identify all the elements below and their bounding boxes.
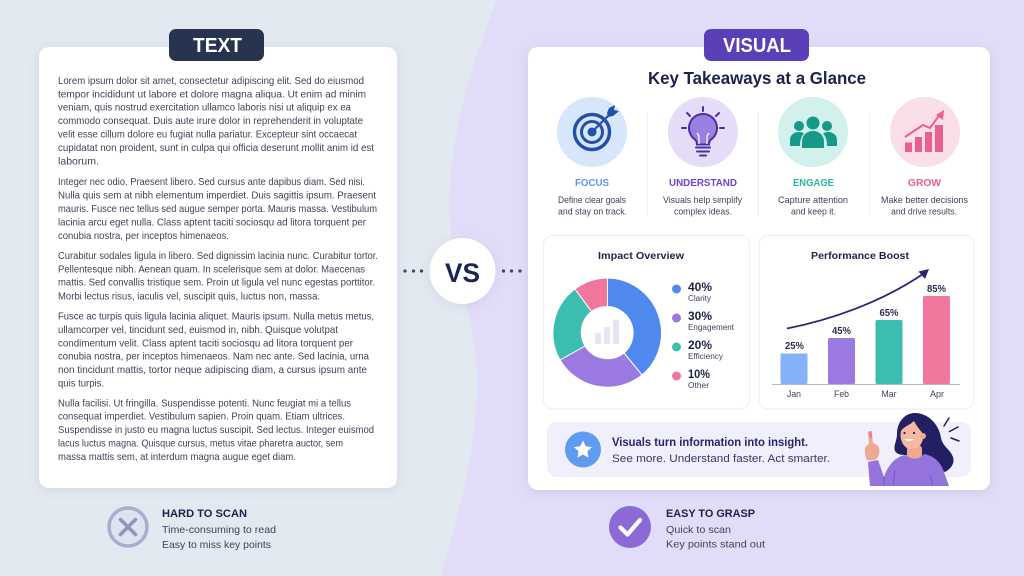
text block: lorem paragraphs: tempor incididunt ut labore et dolore magna aliqua. Ut enim ad minim [58,88,366,100]
text block: lorem paragraphs: cupidatat non proident, sunt in culpa qui officia deserunt mollit anim id est [58,142,374,154]
takeaway: focus [557,97,627,218]
icon: people [778,97,848,167]
legend: Efficiency [688,351,724,361]
takeaway: understand: Visuals help simplify [663,195,742,206]
text block: lorem paragraphs: commodo consequat. Duis aute irure dolor in reprehenderit in voluptate [58,115,363,127]
background: right lavender wave [441,0,1024,576]
bar chart [772,283,960,399]
heading: performance boost: Performance Boost [811,250,910,262]
takeaway: understand: complex ideas. [674,206,732,218]
panel: visual card [528,47,990,490]
legend [672,282,735,390]
text block: lorem paragraphs: mattis. Sed convallis tristique sem. Proin ut ligula vel nunc egestas porttitor. [58,277,375,289]
icon: check circle [609,506,651,548]
legend: Other [688,380,709,390]
verdict: easy to grasp: EASY TO GRASP [666,508,755,520]
text block: lorem paragraphs: quis turpis. [58,378,104,390]
text block: lorem paragraphs: lacus luctus magna. Quisque cursus, metus vitae pharetra auctor, sem [58,437,343,449]
bar chart: 85% [927,283,947,295]
callout: insight banner: Visuals turn information into insight. [612,437,808,449]
text block: lorem paragraphs: Morbi lectus risus, iaculis vel, suscipit quis, luctus non, massa. [58,290,320,302]
heading: TEXT pill: TEXT [193,35,242,57]
icon: lightbulb [668,97,738,167]
title: key takeaways: Key Takeaways at a Glance [648,68,866,88]
connector: left dots [403,269,423,273]
verdict: hard to scan: Time-consuming to read [162,524,276,536]
takeaway: engage: and keep it. [791,206,836,218]
text block: lorem paragraphs: Nulla quis sem at nibh elementum imperdiet. Duis sagittis ipsum. Praesent [58,189,376,201]
heading: VISUAL pill: VISUAL [723,35,791,57]
text block: lorem paragraphs: conubia nostra, per inceptos himenaeos. [58,230,229,242]
takeaway: engage: ENGAGE [793,177,834,189]
illustration: pointing woman [865,413,959,486]
verdict: hard to scan: HARD TO SCAN [162,508,247,520]
connector: right dots [502,269,522,273]
takeaway: engage: Capture attention [778,195,848,206]
legend: 30% [688,311,712,323]
verdict: easy to grasp: Key points stand out [666,538,765,550]
takeaway: focus: Define clear goals [558,195,626,206]
takeaway: grow: GROW [908,177,941,189]
bar chart: 25% [785,340,805,352]
verdict: hard to scan: Easy to miss key points [162,539,271,551]
verdict: easy to grasp: Quick to scan [666,524,731,536]
callout: insight banner: See more. Understand faster. Act smarter. [612,453,830,465]
heading: impact overview: Impact Overview [598,250,685,262]
icon: cross circle [109,508,147,546]
text block: lorem paragraphs: lacinia arcu eget nulla. Class aptent taciti sociosqu ad litora torquent per [58,217,366,229]
takeaway: focus: FOCUS [575,177,609,189]
heading: TEXT pill [169,29,264,61]
panel: impact overview [544,236,750,409]
legend: Clarity [688,293,712,303]
text block: lorem paragraphs: conubia nostra, per inceptos himenaeos. Nam nec ante. Sed lacinia, urna [58,351,369,363]
donut chart [553,278,662,387]
text block: lorem paragraphs: Lorem ipsum dolor sit amet, consectetur adipiscing elit. Sed do eiusmod [58,75,364,87]
icon: rising chart [890,97,960,167]
badge: VS [430,238,496,304]
takeaway: focus: and stay on track. [558,206,627,218]
text block: lorem paragraphs: laborum. [58,156,99,168]
bar chart: Jan [787,389,801,399]
text block: lorem paragraphs: non tincidunt mattis, tortor neque adipiscing diam, a cursus ipsum ante [58,364,367,376]
callout: insight banner [547,422,971,477]
text block: lorem paragraphs: Nulla facilisi. Ut fringilla. Suspendisse potenti. Nunc feugiat mi a tellus [58,397,351,409]
text block: lorem paragraphs: Integer nec odio. Praesent libero. Sed cursus ante dapibus diam. Sed nisi. [58,176,365,188]
text block: lorem paragraphs: Pellentesque nibh. Aenean quam. In scelerisque sem at dolor. Maecenas [58,263,365,275]
bar chart: 65% [880,307,899,319]
text block: lorem paragraphs: ullamcorper vel, tincidunt sed, euismod in, nibh. Quisque volutpat [58,324,338,336]
bar chart: Feb [834,389,849,399]
text block: lorem paragraphs: mauris. Fusce nec tellus sed augue semper porta. Mauris massa. Vestibulum [58,203,377,215]
legend: 10% [688,369,710,381]
legend: Engagement [688,322,735,332]
takeaway: understand [663,97,742,218]
takeaway: engage [778,97,848,218]
verdict: easy to grasp [609,506,765,550]
verdict: hard to scan [109,508,276,551]
text block: lorem paragraphs: massa mattis sem, at interdum magna augue eget diam. [58,451,296,463]
bar chart: 45% [832,325,852,337]
icon: star badge [565,432,601,468]
bar chart: Mar [882,389,897,399]
text block: lorem paragraphs: velit esse cillum dolore eu fugiat nulla pariatur. Excepteur sint occaecat [58,128,357,140]
legend: 40% [688,282,712,294]
takeaway: grow [881,97,968,218]
text block: lorem paragraphs: Fusce ac turpis quis ligula lacinia aliquet. Mauris ipsum. Nulla metus metus, [58,310,374,322]
takeaway: grow: Make better decisions [881,195,968,206]
heading: VISUAL pill [704,29,809,61]
panel: performance boost [759,236,974,409]
legend: 20% [688,340,712,352]
takeaway: grow: and drive results. [891,206,957,218]
arrow: growth trend [787,269,929,328]
text block: lorem paragraphs: veniam, quis nostrud exercitation ullamco laboris nisi ut aliquip ex ea [58,102,351,114]
panel: text card [39,47,397,488]
bar chart: Apr [930,389,944,399]
text block: lorem paragraphs [58,75,378,463]
icon: target with arrow [557,97,627,167]
text block: lorem paragraphs: consequat imperdiet. Vestibulum sapien. Proin quam. Etiam ultrices. [58,411,345,423]
text block: lorem paragraphs: Suspendisse in justo eu magna luctus suscipit. Sed lectus. Integer euismod [58,424,374,436]
badge: VS: VS [445,258,480,288]
text block: lorem paragraphs: condimentum velit. Class aptent taciti sociosqu ad litora torquent per [58,337,353,349]
takeaway: understand: UNDERSTAND [669,177,737,189]
text block: lorem paragraphs: Curabitur sodales ligula in libero. Sed dignissim lacinia nunc. Curabitur tortor. [58,250,378,262]
